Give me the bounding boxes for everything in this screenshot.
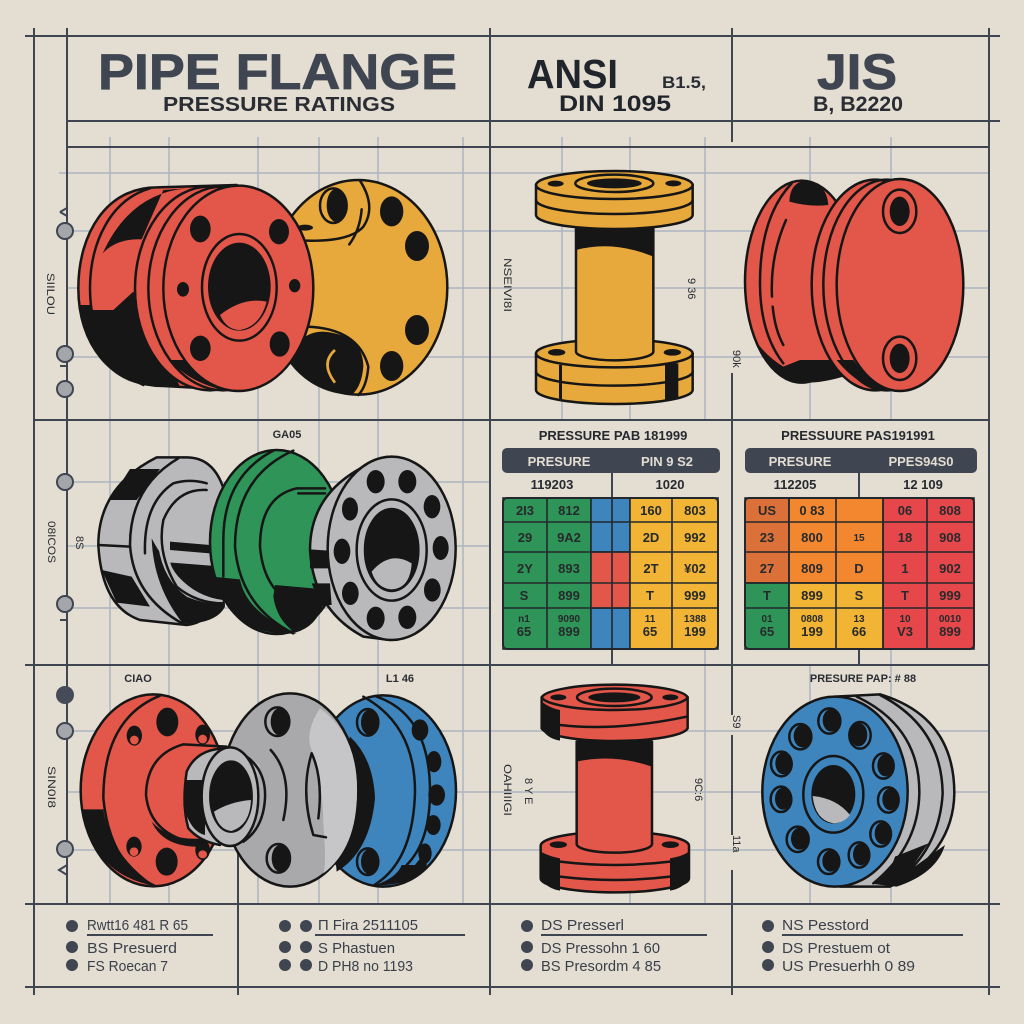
table: JIS pressure ratings: PRESURE bbox=[769, 454, 832, 469]
flange: red, grey and blue assembly bbox=[81, 693, 456, 887]
table: ANSI pressure ratings: 9A2 bbox=[557, 530, 581, 545]
table: JIS pressure ratings: 800 bbox=[801, 530, 823, 545]
table: ANSI pressure ratings: n1 bbox=[518, 614, 530, 625]
table: ANSI pressure ratings: 2D bbox=[643, 530, 659, 545]
table: JIS pressure ratings: 18 bbox=[898, 530, 912, 545]
axis markers and side labels: OAHIIIGI bbox=[501, 764, 513, 816]
axis markers and side labels: 9 36 bbox=[685, 278, 697, 299]
title block: PRESSURE RATINGS bbox=[163, 94, 395, 116]
flange: blue and grey disc bbox=[762, 694, 954, 887]
table: JIS pressure ratings: 12 109 bbox=[903, 477, 943, 492]
table: JIS pressure ratings: PRESSUURE PAS191991 bbox=[781, 428, 935, 443]
table: JIS pressure ratings: 65 bbox=[760, 624, 774, 639]
heading: ANSI: ANSI bbox=[527, 51, 618, 97]
table: JIS pressure ratings: 899 bbox=[801, 588, 823, 603]
flange: red and yellow pair bbox=[78, 180, 447, 395]
footer notes column 1 bbox=[66, 917, 213, 975]
table: ANSI pressure ratings: T bbox=[646, 588, 654, 603]
table: ANSI pressure ratings: 899 bbox=[558, 624, 580, 639]
table: JIS pressure ratings: T bbox=[901, 588, 909, 603]
axis markers and side labels: SIILOU bbox=[44, 273, 56, 315]
table: JIS pressure ratings: 0 83 bbox=[799, 503, 825, 518]
table: ANSI pressure ratings: 119203 bbox=[531, 477, 573, 492]
table: JIS pressure ratings: 808 bbox=[939, 503, 961, 518]
axis markers and side labels: SIN0I8 bbox=[45, 766, 57, 808]
table: ANSI pressure ratings: 803 bbox=[684, 503, 706, 518]
table: ANSI pressure ratings: 65 bbox=[517, 624, 531, 639]
footer notes column 1: FS Roecan 7 bbox=[87, 958, 168, 975]
table: JIS pressure ratings: 27 bbox=[760, 561, 774, 576]
footer notes column 2: П Fira 2511105 bbox=[318, 917, 418, 934]
table: JIS pressure ratings: 899 bbox=[939, 624, 961, 639]
table: ANSI pressure ratings: 812 bbox=[558, 503, 580, 518]
table: ANSI pressure ratings: PIN 9 S2 bbox=[641, 454, 693, 469]
table: ANSI pressure ratings: 199 bbox=[684, 624, 706, 639]
footer notes column 3: BS Presordm 4 85 bbox=[541, 958, 661, 975]
table: JIS pressure ratings: 908 bbox=[939, 530, 961, 545]
table: ANSI pressure ratings: 2T bbox=[643, 561, 659, 576]
table: JIS pressure ratings: 66 bbox=[852, 624, 866, 639]
axis markers and side labels: 90k bbox=[730, 350, 742, 368]
heading: JIS: JIS bbox=[817, 44, 897, 100]
table: JIS pressure ratings: 0010 bbox=[939, 614, 962, 625]
table: JIS pressure ratings: 199 bbox=[801, 624, 823, 639]
heading: JIS bbox=[813, 44, 903, 116]
table: ANSI pressure ratings: 893 bbox=[558, 561, 580, 576]
flange: grey, green and grey assembly bbox=[98, 450, 456, 640]
footer notes column 3 bbox=[521, 917, 707, 975]
table: ANSI pressure ratings: 160 bbox=[640, 503, 662, 518]
table: ANSI pressure ratings: 992 bbox=[684, 530, 706, 545]
table: ANSI pressure ratings: ¥02 bbox=[684, 561, 706, 576]
footer notes column 2 bbox=[279, 917, 465, 975]
table: JIS pressure ratings: S bbox=[855, 588, 864, 603]
axis markers and side labels: 11a bbox=[730, 835, 742, 853]
axis markers and side labels: 8 Y E bbox=[522, 778, 534, 805]
table: ANSI pressure ratings: 11 bbox=[645, 614, 656, 625]
table: JIS pressure ratings: 06 bbox=[898, 503, 912, 518]
footer notes column 1: BS Presuerd bbox=[87, 940, 177, 957]
footer notes column 3: DS Pressohn 1 60 bbox=[541, 940, 660, 957]
flange: yellow spool bbox=[536, 171, 693, 404]
axis markers and side labels: 08ICOS bbox=[45, 521, 57, 563]
table: JIS pressure ratings: 13 bbox=[853, 614, 865, 625]
table: JIS pressure ratings: V3 bbox=[897, 624, 913, 639]
axis markers and side labels: 9C:6 bbox=[692, 778, 704, 801]
footer notes column 4 bbox=[762, 917, 963, 975]
footer notes column 2: S Phastuen bbox=[318, 940, 395, 957]
table: JIS pressure ratings: 902 bbox=[939, 561, 961, 576]
table: JIS pressure ratings bbox=[745, 428, 977, 649]
footer notes column 1: Rwtt16 481 R 65 bbox=[87, 917, 188, 934]
table: ANSI pressure ratings: S bbox=[520, 588, 529, 603]
title block: PIPE FLANGE bbox=[98, 44, 457, 100]
table: ANSI pressure ratings: 899 bbox=[558, 588, 580, 603]
table: JIS pressure ratings: T bbox=[763, 588, 771, 603]
table: JIS pressure ratings: 999 bbox=[939, 588, 961, 603]
axis markers and side labels: L1 46 bbox=[386, 673, 414, 685]
table: ANSI pressure ratings: 1020 bbox=[656, 477, 684, 492]
table: ANSI pressure ratings: 2Y bbox=[517, 561, 533, 576]
flange: red spool bbox=[541, 685, 689, 892]
axis markers and side labels: CIAO bbox=[124, 673, 152, 685]
heading: JIS: B, B2220 bbox=[813, 93, 903, 116]
table: JIS pressure ratings: 01 bbox=[761, 614, 773, 625]
footer notes column 4: DS Prestuem ot bbox=[782, 940, 891, 957]
axis markers and side labels: 8S bbox=[73, 536, 85, 549]
table: ANSI pressure ratings bbox=[502, 428, 720, 649]
footer notes column 3: DS Presserl bbox=[541, 917, 624, 934]
table: ANSI pressure ratings: 29 bbox=[518, 530, 532, 545]
axis markers and side labels: GA05 bbox=[273, 429, 301, 441]
table: ANSI pressure ratings: 1388 bbox=[684, 614, 707, 625]
footer notes column 4: NS Pesstord bbox=[782, 917, 869, 934]
table: JIS pressure ratings: D bbox=[854, 561, 864, 576]
table: JIS pressure ratings: 809 bbox=[801, 561, 823, 576]
heading: ANSI bbox=[527, 51, 706, 116]
table: JIS pressure ratings: 1 bbox=[901, 561, 909, 576]
footer notes column 4: US Presuerhh 0 89 bbox=[782, 958, 915, 975]
footer notes column 2: D PH8 no 1193 bbox=[318, 958, 413, 975]
axis markers and side labels bbox=[44, 208, 916, 875]
table: ANSI pressure ratings: 65 bbox=[643, 624, 657, 639]
axis markers and side labels: PRESURE PAP: # 88 bbox=[810, 673, 916, 685]
table: JIS pressure ratings: 0808 bbox=[801, 614, 824, 625]
table: ANSI pressure ratings: 999 bbox=[684, 588, 706, 603]
axis markers and side labels: S9 bbox=[730, 715, 742, 728]
table: ANSI pressure ratings: 9090 bbox=[558, 614, 581, 625]
heading: ANSI: DIN 1095 bbox=[559, 91, 671, 116]
heading: ANSI: B1.5, bbox=[662, 73, 706, 92]
table: ANSI pressure ratings: 2I3 bbox=[516, 503, 534, 518]
flange: red blind flange bbox=[745, 179, 963, 391]
table: JIS pressure ratings: 10 bbox=[899, 614, 911, 625]
axis markers and side labels: NSEIVI8I bbox=[501, 258, 513, 312]
table: JIS pressure ratings: US bbox=[758, 503, 776, 518]
table: JIS pressure ratings: 23 bbox=[760, 530, 774, 545]
table: JIS pressure ratings: PPES94S0 bbox=[888, 454, 954, 469]
table: JIS pressure ratings: 112205 bbox=[774, 477, 816, 492]
table: ANSI pressure ratings: PRESSURE PAB 181999 bbox=[539, 428, 687, 443]
table: ANSI pressure ratings: PRESURE bbox=[528, 454, 591, 469]
table: JIS pressure ratings: 15 bbox=[853, 533, 865, 544]
